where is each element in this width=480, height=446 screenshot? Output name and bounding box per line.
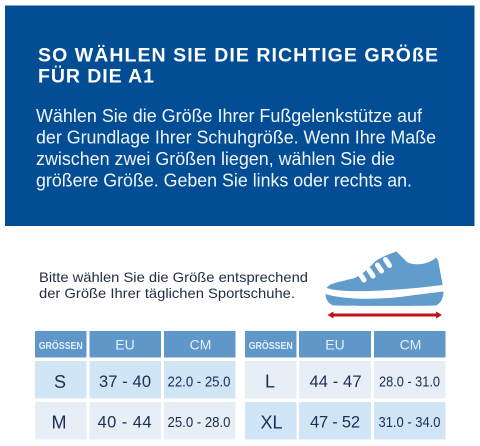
intro text: zwischen zwei Größen liegen, wählen Sie die (36, 149, 395, 169)
row S: 37 - 40 (99, 373, 151, 391)
row L: L (265, 372, 275, 392)
table header (35, 331, 236, 358)
heading: FÜR DIE A1 (38, 64, 154, 88)
row XL: 31.0 - 34.0 (378, 414, 440, 431)
intro text: der Grundlage Ihrer Schuhgröße. Wenn Ihre Maße (36, 128, 436, 148)
table header (245, 331, 446, 358)
row L: 44 - 47 (310, 373, 362, 391)
intro text: Wählen Sie die Größe Ihrer Fußgelenkstütze auf (36, 106, 423, 126)
row M: 40 - 44 (98, 414, 152, 432)
row XL: 47 - 52 (310, 414, 360, 432)
row XL (245, 402, 446, 440)
arrow (328, 312, 442, 318)
table header: EU (115, 336, 135, 352)
row M: M (52, 412, 66, 432)
row L: 28.0 - 31.0 (379, 374, 440, 390)
instruction text (39, 269, 308, 301)
row S (35, 361, 236, 398)
heading (38, 44, 438, 88)
table: sizes L and XL (245, 331, 446, 440)
row M (35, 402, 236, 440)
table header: CM (400, 336, 421, 352)
table header: CM (190, 336, 211, 352)
row S: 22.0 - 25.0 (168, 374, 230, 390)
instruction text: Bitte wählen Sie die Größe entsprechend (39, 269, 308, 285)
panel: blue header (5, 6, 474, 226)
intro text (36, 106, 436, 190)
row S: S (54, 372, 66, 392)
row M: 25.0 - 28.0 (168, 414, 230, 431)
icon: shoe with length arrow (326, 252, 444, 318)
row XL: XL (260, 412, 283, 432)
intro text: größere Größe. Geben Sie links oder rechts an. (36, 170, 412, 190)
instruction text: der Größe Ihrer täglichen Sportschuhe. (39, 285, 295, 301)
table header: EU (325, 336, 345, 352)
row L (245, 361, 446, 398)
table header: GRÖSSEN (249, 339, 293, 352)
table: sizes S and M (35, 331, 236, 440)
table header: GRÖSSEN (39, 339, 83, 352)
heading: SO WÄHLEN SIE DIE RICHTIGE GRÖßE (38, 44, 438, 66)
